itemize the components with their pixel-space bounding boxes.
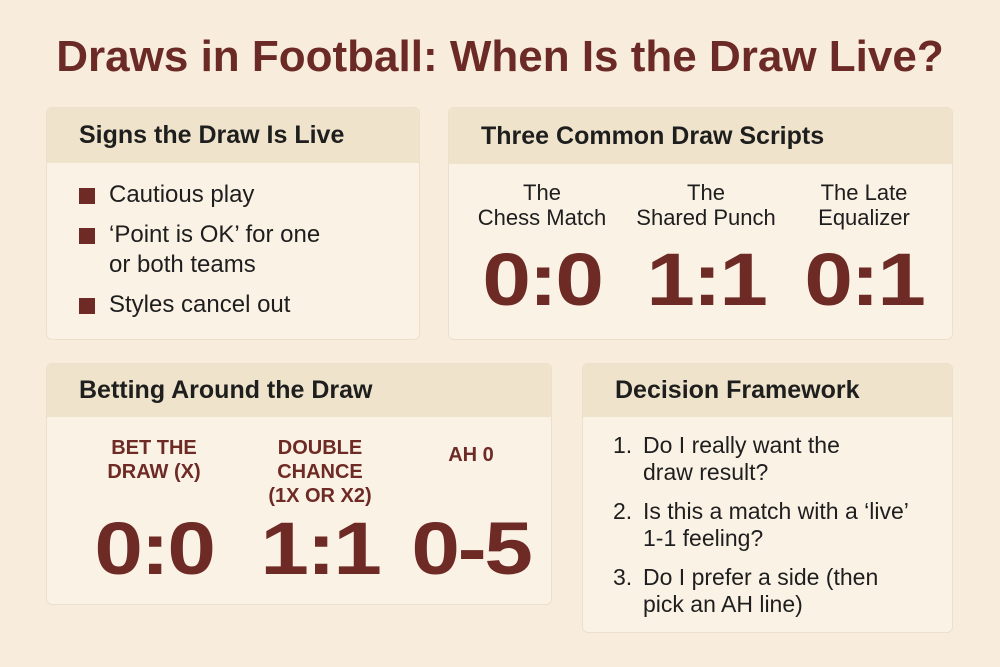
script: shared punch bbox=[636, 180, 776, 321]
script: shared punch: The bbox=[687, 180, 725, 205]
option: AH 0: AH 0 bbox=[448, 444, 494, 466]
option: bet the draw bbox=[94, 437, 214, 590]
script: chess match: The bbox=[523, 180, 561, 205]
heading bbox=[583, 364, 952, 417]
script: late equalizer: 0:1 bbox=[804, 238, 924, 321]
numbered list: Do I really want the bbox=[643, 432, 840, 458]
panel: decision framework bbox=[582, 363, 953, 633]
numbered list: 1-1 feeling? bbox=[643, 525, 763, 551]
bullet list: Styles cancel out bbox=[109, 291, 290, 318]
title: Draws in Football: When Is the Draw Live? bbox=[56, 32, 944, 81]
heading: Three Common Draw Scripts bbox=[481, 122, 824, 150]
bullet list: or both teams bbox=[109, 251, 256, 278]
panel: three common draw scripts bbox=[448, 107, 953, 340]
script: shared punch: Shared Punch bbox=[636, 205, 776, 230]
bullet list: ‘Point is OK’ for one bbox=[109, 221, 320, 248]
heading bbox=[47, 364, 551, 417]
option: double chance: CHANCE bbox=[277, 461, 363, 483]
script: late equalizer: The Late bbox=[821, 180, 907, 205]
heading bbox=[47, 108, 419, 163]
option: bet the draw: DRAW (X) bbox=[107, 461, 201, 483]
option: AH 0: 0-5 bbox=[411, 507, 531, 590]
script: shared punch: 1:1 bbox=[646, 238, 766, 321]
script: late equalizer: Equalizer bbox=[818, 205, 910, 230]
bullet list bbox=[79, 181, 320, 318]
bullet list: Cautious play bbox=[109, 181, 254, 208]
numbered list: draw result? bbox=[643, 459, 768, 485]
numbered list: 1. bbox=[613, 432, 632, 458]
script: chess match: Chess Match bbox=[478, 205, 606, 230]
option: double chance: DOUBLE bbox=[278, 437, 362, 459]
numbered list: Do I prefer a side (then bbox=[643, 564, 878, 590]
option: double chance bbox=[260, 437, 380, 590]
heading: Signs the Draw Is Live bbox=[79, 121, 344, 149]
option: double chance: (1X OR X2) bbox=[268, 485, 372, 507]
option: AH 0 bbox=[411, 444, 531, 590]
heading: Decision Framework bbox=[615, 376, 860, 404]
script: chess match bbox=[478, 180, 606, 321]
option: bet the draw: BET THE bbox=[111, 437, 197, 459]
numbered list: Is this a match with a ‘live’ bbox=[643, 498, 909, 524]
numbered list: 3. bbox=[613, 564, 632, 590]
panel: signs the draw is live bbox=[46, 107, 420, 340]
numbered list: pick an AH line) bbox=[643, 591, 803, 617]
option: bet the draw: 0:0 bbox=[94, 507, 214, 590]
script: late equalizer bbox=[804, 180, 924, 321]
panel: betting around the draw bbox=[46, 363, 552, 605]
heading: Betting Around the Draw bbox=[79, 376, 373, 404]
numbered list bbox=[613, 432, 909, 617]
heading bbox=[449, 108, 952, 164]
script: chess match: 0:0 bbox=[482, 238, 602, 321]
option: double chance: 1:1 bbox=[260, 507, 380, 590]
numbered list: 2. bbox=[613, 498, 632, 524]
